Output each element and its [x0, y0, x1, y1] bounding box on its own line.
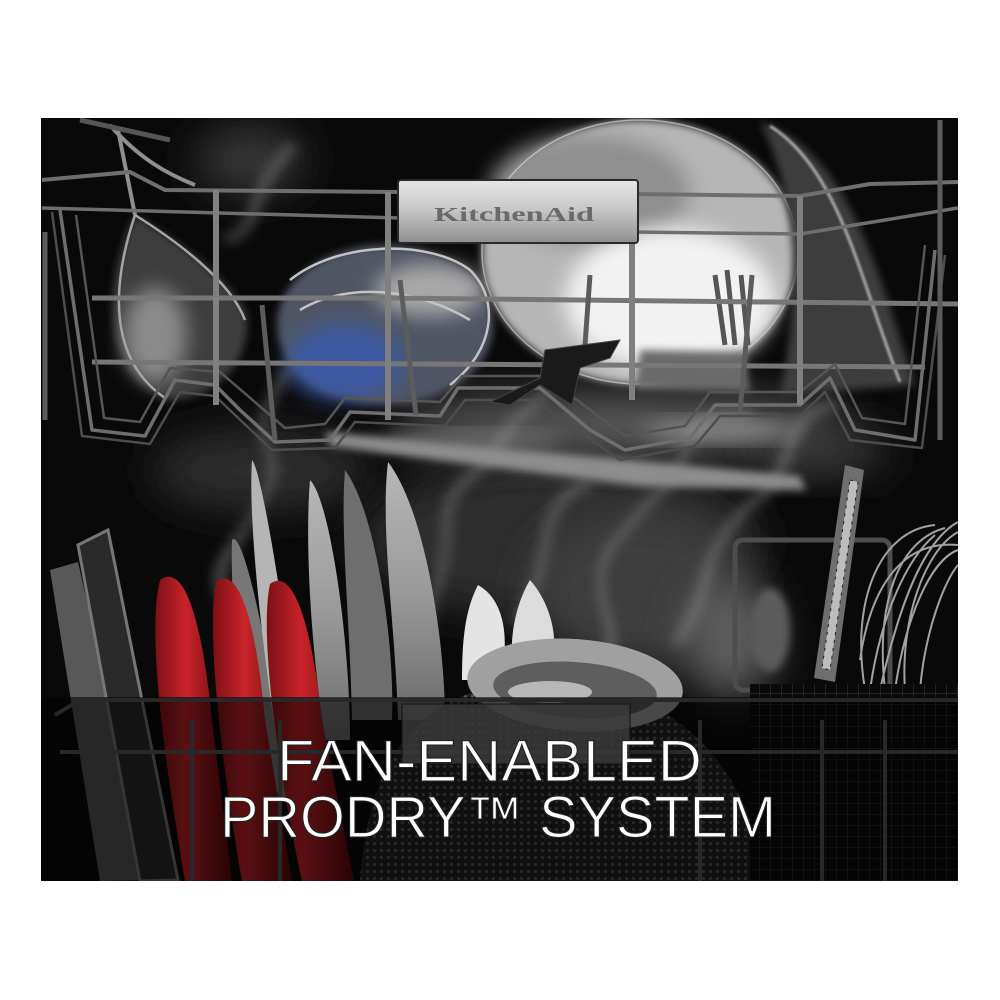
infographic: dishwasher photo with caption [41, 118, 958, 881]
wine glass [80, 120, 247, 400]
steam wisps [224, 150, 850, 680]
upper dish rack [42, 120, 960, 460]
lower rack handle [402, 704, 630, 764]
KitchenAid logo plate [398, 180, 638, 243]
white dinner plates [232, 460, 445, 800]
large clear glass bowl, top right [482, 120, 915, 395]
utensil basket with whisks [735, 465, 958, 881]
stacked baking trays [50, 530, 178, 881]
caption heading [220, 729, 776, 850]
blue glass bowl [277, 245, 493, 405]
caption heading: FAN-ENABLED [277, 729, 702, 794]
steam clouds [150, 128, 890, 700]
KitchenAid logo plate: KitchenAid [434, 204, 594, 226]
caption heading: PRODRY™ SYSTEM [220, 785, 776, 850]
photo: dishwasher interior [41, 118, 960, 881]
red plates [155, 577, 354, 881]
metal colander bowl [360, 632, 765, 881]
caption band [41, 697, 958, 881]
shelf plate under upper rack [325, 432, 806, 490]
rack clip [490, 340, 620, 405]
small white saucers [462, 580, 554, 680]
lower rack [55, 700, 958, 881]
